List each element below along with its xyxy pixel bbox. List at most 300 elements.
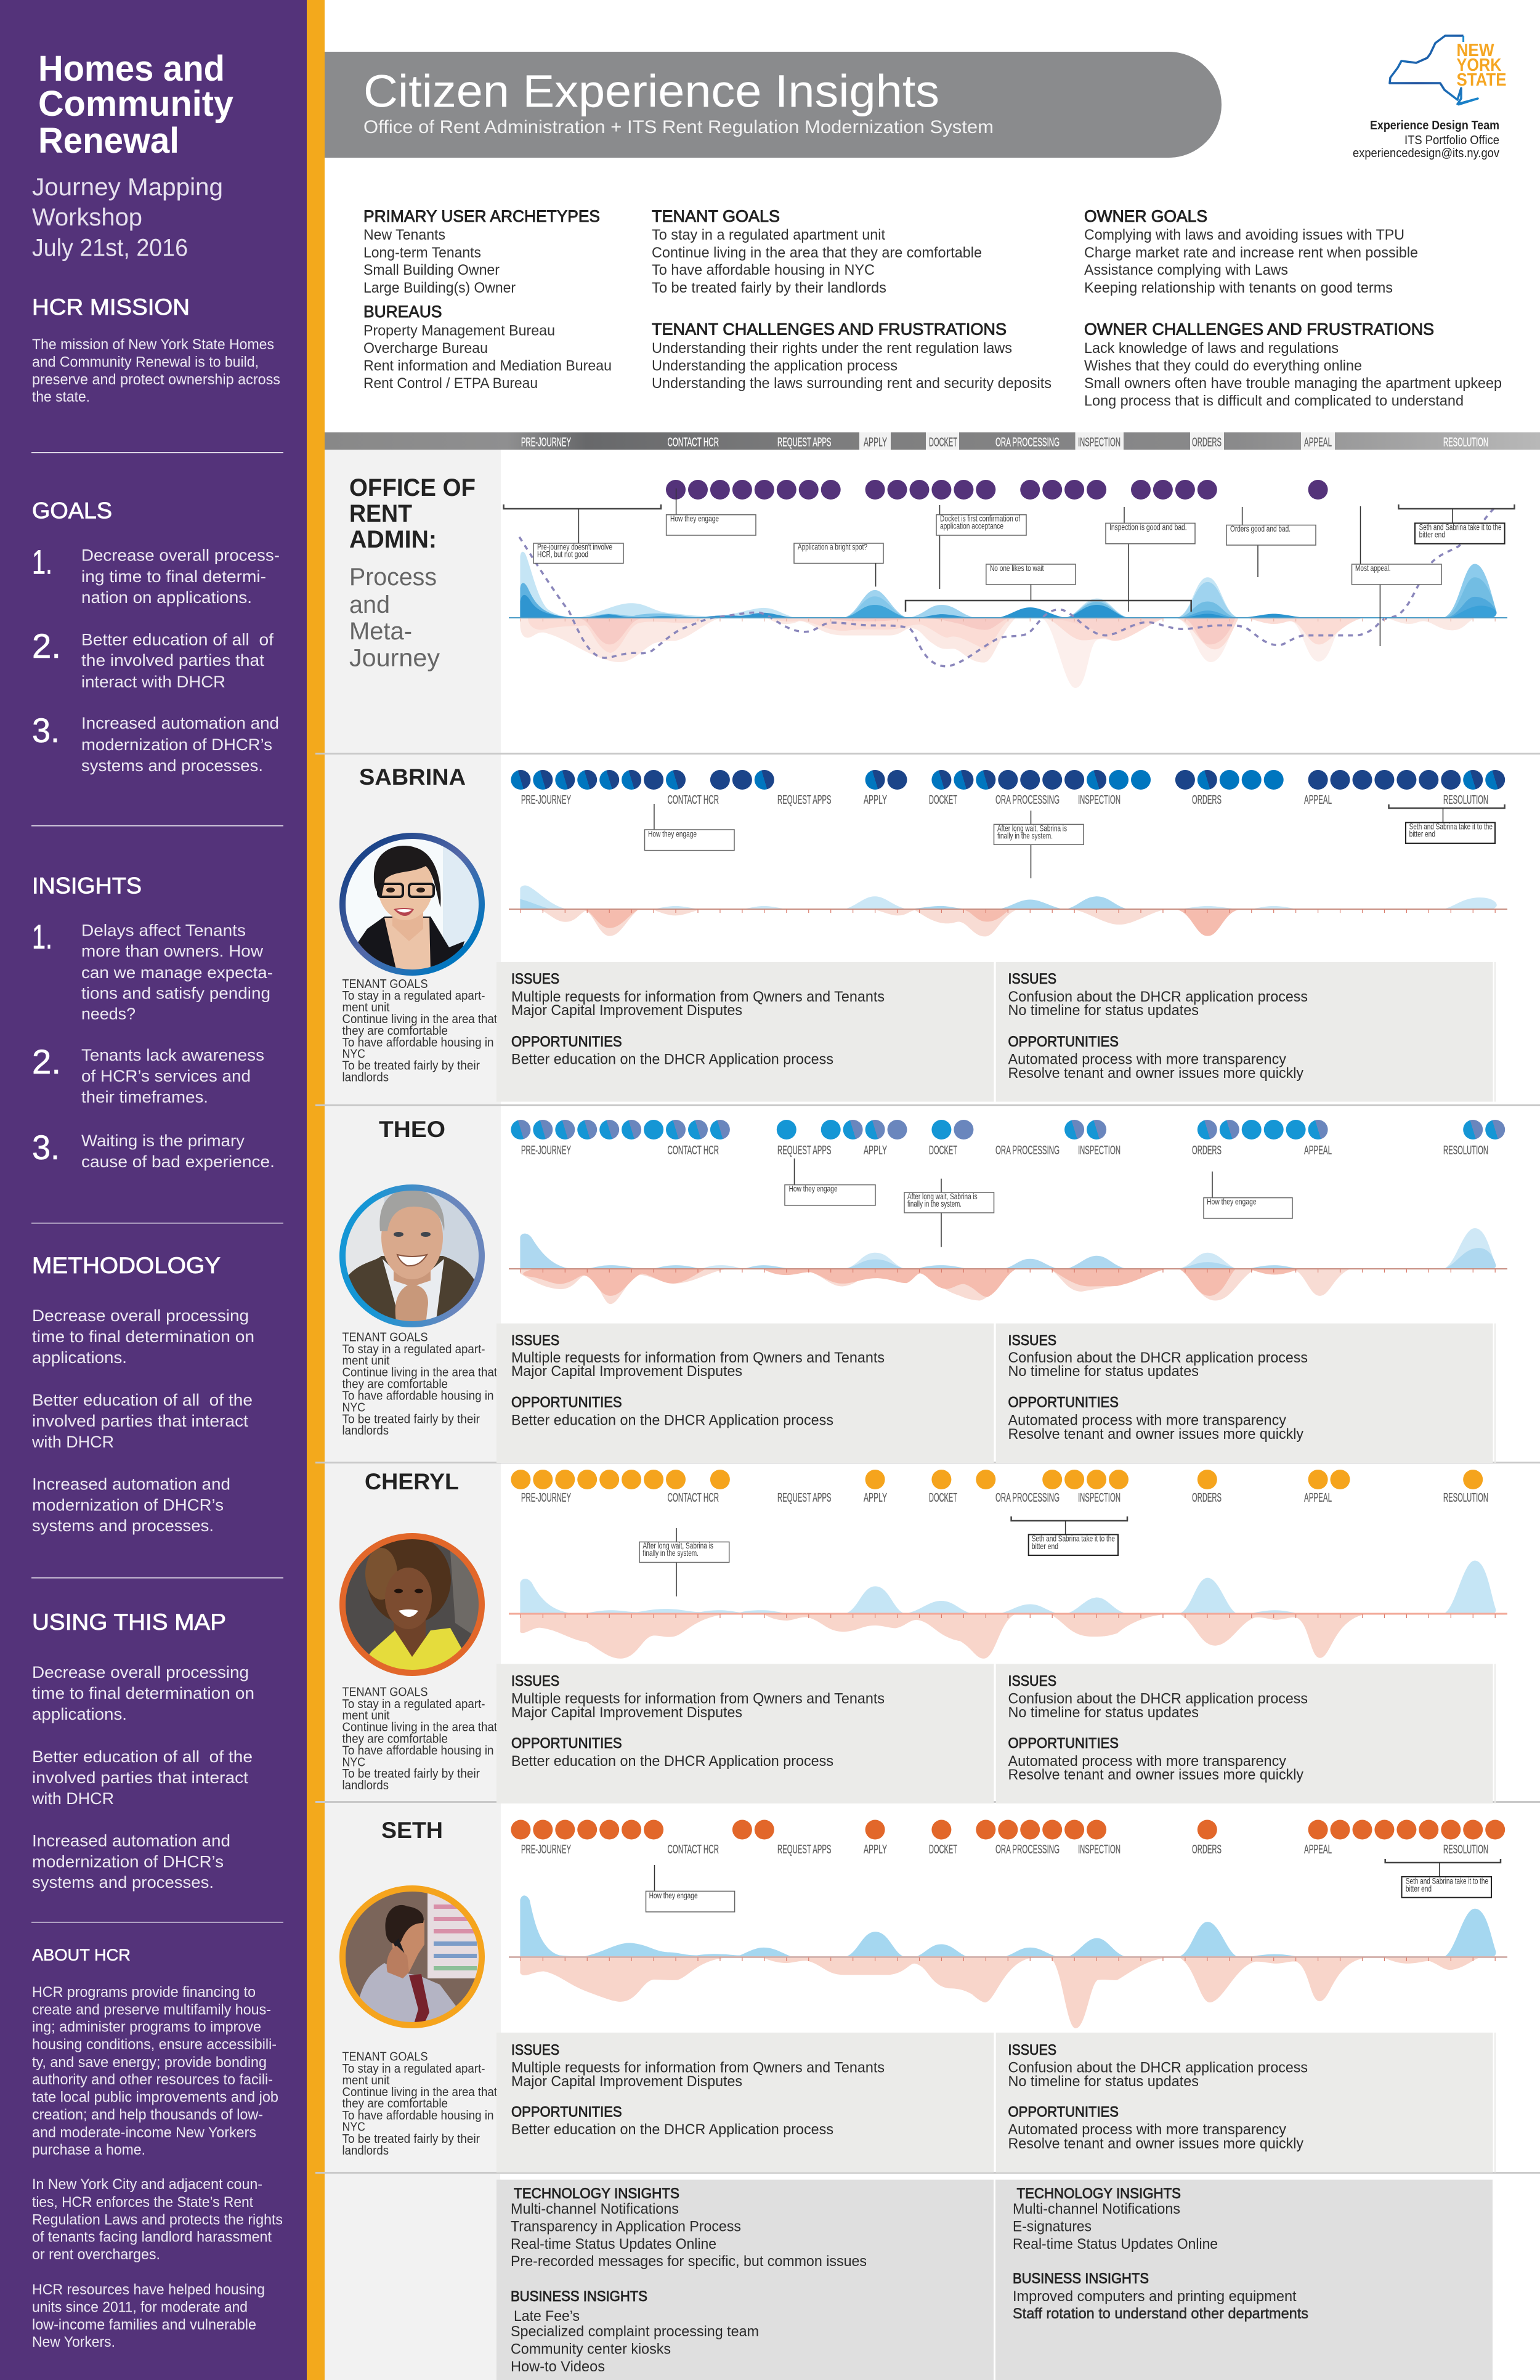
tenant goals: Sabrina: TENANT GOALS bbox=[342, 977, 428, 991]
callouts: Cheryl: After long wait, Sabrina is bbox=[642, 1540, 713, 1550]
office callouts: Docket is first confirmation of bbox=[940, 514, 1020, 524]
stage labels: Theo: APPLY bbox=[864, 1144, 887, 1157]
insights list: Waiting is the primary bbox=[81, 1131, 245, 1150]
panel: technology and business insights, right: E-signatures bbox=[1013, 2219, 1092, 2235]
name: Sabrina: SABRINA bbox=[359, 764, 466, 790]
logo: New York State: STATE bbox=[1456, 70, 1507, 90]
office callouts: Inspection is good and bad. bbox=[1109, 522, 1187, 532]
stage labels: Seth: INSPECTION bbox=[1078, 1843, 1121, 1856]
stage labels: Cheryl: DOCKET bbox=[929, 1491, 957, 1505]
stage labels: Sabrina: RESOLUTION bbox=[1443, 793, 1488, 807]
issues and opportunities: Sabrina, right: Resolve tenant and owner issues more quickly bbox=[1008, 1065, 1303, 1082]
area chart: Theo bbox=[520, 1228, 1496, 1304]
issues and opportunities: Sabrina, right: ISSUES bbox=[1008, 971, 1056, 987]
stage labels: Seth: CONTACT HCR bbox=[668, 1843, 719, 1856]
owner challenges: Lack knowledge of laws and regulations bbox=[1084, 340, 1339, 357]
bureaus: Rent information and Mediation Bureau bbox=[363, 357, 612, 374]
sidebar title: Community bbox=[38, 84, 233, 124]
issues and opportunities: Theo, right bbox=[996, 1324, 1496, 1463]
insights list: Delays affect Tenants bbox=[81, 921, 246, 940]
issues and opportunities: Theo, left: Multiple requests for information from Qwners and Tenants bbox=[511, 1350, 885, 1366]
insights list: of HCR’s services and bbox=[81, 1067, 251, 1085]
tenant goals: Theo: TENANT GOALS bbox=[342, 1330, 428, 1344]
sidebar title: Homes and bbox=[38, 49, 225, 89]
goals list: Better education of all of bbox=[81, 631, 274, 649]
logo: New York State: YORK bbox=[1456, 55, 1502, 75]
methodology: time to final determination on bbox=[32, 1327, 254, 1346]
tenant goals: Cheryl: To have affordable housing in bbox=[342, 1744, 494, 1757]
touchpoints: Cheryl bbox=[511, 1470, 1483, 1489]
tenant goals: Sabrina: they are comfortable bbox=[342, 1024, 448, 1038]
using this map bbox=[31, 1609, 254, 1892]
stage labels: Sabrina bbox=[521, 793, 1488, 807]
panel: technology and business insights, right: TECHNOLOGY INSIGHTS bbox=[1016, 2185, 1181, 2202]
tenant goals: Seth: To have affordable housing in bbox=[342, 2109, 494, 2123]
tenant goals: Sabrina: ment unit bbox=[342, 1001, 390, 1014]
issues and opportunities: Seth, right bbox=[996, 2033, 1496, 2172]
callouts: Seth bbox=[646, 1859, 1501, 1912]
goals list: systems and processes. bbox=[81, 756, 263, 775]
tenant goals: Cheryl: ment unit bbox=[342, 1709, 390, 1723]
owner challenges bbox=[1084, 320, 1502, 409]
stage labels: Seth: ORDERS bbox=[1192, 1843, 1222, 1856]
area chart: Cheryl bbox=[520, 1561, 1496, 1659]
panel: technology and business insights, left: Multi-channel Notifications bbox=[511, 2201, 679, 2217]
callouts: Theo: How they engage bbox=[789, 1184, 838, 1194]
stage labels: Cheryl: INSPECTION bbox=[1078, 1491, 1121, 1505]
using this map: Better education of all of the bbox=[32, 1747, 253, 1766]
journey stage header bar: REQUEST APPS bbox=[777, 435, 832, 449]
issues and opportunities: Theo, right: Confusion about the DHCR application process bbox=[1008, 1350, 1308, 1366]
issues and opportunities: Cheryl, right: OPPORTUNITIES bbox=[1008, 1735, 1119, 1752]
tenant goals: Cheryl bbox=[342, 1685, 497, 1792]
owner challenges: Wishes that they could do everything online bbox=[1084, 357, 1362, 374]
stage labels: Sabrina: APPEAL bbox=[1304, 793, 1332, 807]
goals list: nation on applications. bbox=[81, 588, 252, 607]
about HCR: Regulation Laws and protects the rights bbox=[32, 2212, 283, 2228]
bureaus bbox=[363, 302, 612, 392]
using this map: time to final determination on bbox=[32, 1684, 254, 1702]
panel: technology and business insights, left: Specialized complaint processing team bbox=[511, 2323, 759, 2340]
tenant goals: Seth: they are comfortable bbox=[342, 2097, 448, 2111]
tenant challenges: Understanding the application process bbox=[652, 357, 898, 374]
heading: office of rent admin: OFFICE OF bbox=[349, 474, 476, 501]
stage labels: Theo: INSPECTION bbox=[1078, 1144, 1121, 1157]
workshop name and date: Workshop bbox=[32, 204, 142, 231]
primary user archetypes: PRIMARY USER ARCHETYPES bbox=[363, 207, 600, 225]
office callouts: bitter end bbox=[1419, 530, 1445, 540]
goals list: 3. bbox=[32, 711, 60, 750]
stage labels: Cheryl: APPEAL bbox=[1304, 1491, 1332, 1505]
methodology: Increased automation and bbox=[32, 1475, 230, 1494]
issues and opportunities: Seth, right: No timeline for status updates bbox=[1008, 2073, 1199, 2090]
panel: technology and business insights, left: BUSINESS INSIGHTS bbox=[511, 2288, 647, 2305]
issues and opportunities: Seth, left: ISSUES bbox=[511, 2042, 559, 2058]
stage labels: Sabrina: INSPECTION bbox=[1078, 793, 1121, 807]
workshop name and date: Journey Mapping bbox=[32, 174, 223, 201]
about HCR: creation; and help thousands of low- bbox=[32, 2107, 263, 2123]
journey stage header bar: CONTACT HCR bbox=[668, 435, 719, 449]
tenant goals: Seth: TENANT GOALS bbox=[342, 2050, 428, 2064]
row: Sabrina bbox=[341, 764, 1507, 1102]
office touchpoint circles bbox=[666, 480, 1328, 500]
tenant goals: Sabrina: To stay in a regulated apart- bbox=[342, 989, 485, 1003]
journey stage header bar: APPEAL bbox=[1304, 435, 1332, 449]
issues and opportunities: Sabrina, left: ISSUES bbox=[511, 971, 559, 987]
journey stage header bar: ORA PROCESSING bbox=[995, 435, 1060, 449]
subheading: process and meta-journey: Meta- bbox=[349, 618, 412, 645]
journey stage header bar: PRE-JOURNEY bbox=[521, 435, 571, 449]
touchpoints: Seth bbox=[511, 1819, 1505, 1839]
stage labels: Sabrina: ORDERS bbox=[1192, 793, 1222, 807]
main title: Citizen Experience Insights bbox=[363, 65, 939, 117]
team credit: experiencedesign@its.ny.gov bbox=[1353, 147, 1499, 160]
about HCR bbox=[32, 1946, 283, 2350]
tenant challenges bbox=[652, 320, 1052, 392]
primary user archetypes: Small Building Owner bbox=[363, 262, 500, 278]
row: Cheryl bbox=[341, 1469, 1507, 1803]
stage labels: Sabrina: ORA PROCESSING bbox=[995, 793, 1060, 807]
white gap above insights panels bbox=[500, 2174, 1493, 2180]
tenant goals: Seth bbox=[342, 2050, 497, 2158]
tenant goals: Sabrina: landlords bbox=[342, 1071, 389, 1084]
stage labels: Theo: DOCKET bbox=[929, 1144, 957, 1157]
tenant goals: Cheryl: TENANT GOALS bbox=[342, 1685, 428, 1699]
office callouts: HCR, but not good bbox=[537, 549, 588, 559]
stage labels: Theo: RESOLUTION bbox=[1443, 1144, 1488, 1157]
panel: technology and business insights, left bbox=[496, 2180, 994, 2380]
methodology: modernization of DHCR’s bbox=[32, 1496, 224, 1514]
goals list: Decrease overall process- bbox=[81, 546, 280, 564]
primary user archetypes: Long-term Tenants bbox=[363, 245, 481, 261]
stage labels: Cheryl: REQUEST APPS bbox=[777, 1491, 832, 1505]
tenant goals: Cheryl: NYC bbox=[342, 1755, 365, 1769]
tenant goals: Cheryl: Continue living in the area that bbox=[342, 1721, 497, 1734]
owner goals: OWNER GOALS bbox=[1084, 207, 1207, 225]
callouts: Cheryl: bitter end bbox=[1032, 1541, 1058, 1551]
journey stage header bar: ORDERS bbox=[1192, 435, 1222, 449]
stage labels: Theo: REQUEST APPS bbox=[777, 1144, 832, 1157]
using this map: modernization of DHCR’s bbox=[32, 1853, 224, 1871]
stage labels: Sabrina: PRE-JOURNEY bbox=[521, 793, 571, 807]
heading: office of rent admin bbox=[349, 474, 476, 553]
tenant goals: Theo: To stay in a regulated apart- bbox=[342, 1343, 485, 1356]
about HCR: low-income families and vulnerable bbox=[32, 2317, 256, 2333]
callouts: Sabrina: finally in the system. bbox=[997, 831, 1053, 841]
issues and opportunities: Seth, left bbox=[496, 2033, 994, 2172]
touchpoints: Sabrina bbox=[511, 770, 1505, 790]
team credit bbox=[1353, 119, 1499, 160]
goals list: 1. bbox=[32, 542, 52, 581]
tenant goals: To have affordable housing in NYC bbox=[652, 262, 875, 278]
using this map: USING THIS MAP bbox=[32, 1609, 226, 1635]
tenant challenges: Understanding the laws surrounding rent and security deposits bbox=[652, 375, 1052, 392]
insights list: cause of bad experience. bbox=[81, 1152, 275, 1171]
issues and opportunities: Sabrina, left: Multiple requests for information from Qwners and Tenants bbox=[511, 989, 885, 1005]
journey stage header bar: INSPECTION bbox=[1078, 435, 1121, 449]
about HCR: units since 2011, for moderate and bbox=[32, 2299, 248, 2316]
bureaus: Property Management Bureau bbox=[363, 323, 555, 339]
issues and opportunities: Cheryl, left: Multiple requests for information from Qwners and Tenants bbox=[511, 1690, 885, 1707]
insights list: INSIGHTS bbox=[32, 873, 142, 899]
tenant goals: To stay in a regulated apartment unit bbox=[652, 227, 885, 243]
issues and opportunities: Theo, left: ISSUES bbox=[511, 1332, 559, 1349]
issues and opportunities: Seth, right: Confusion about the DHCR application process bbox=[1008, 2060, 1308, 2076]
stage labels: Seth: APPEAL bbox=[1304, 1843, 1332, 1856]
issues and opportunities: Sabrina, left: OPPORTUNITIES bbox=[511, 1034, 622, 1050]
tenant goals: Seth: landlords bbox=[342, 2144, 389, 2158]
issues and opportunities: Seth, right: Resolve tenant and owner issues more quickly bbox=[1008, 2135, 1303, 2152]
issues and opportunities: Sabrina, right: Automated process with more transparency bbox=[1008, 1051, 1286, 1068]
panel: technology and business insights, left: How-to Videos bbox=[511, 2358, 605, 2375]
name: Cheryl: CHERYL bbox=[365, 1469, 459, 1494]
using this map: Decrease overall processing bbox=[32, 1663, 249, 1682]
stage labels: Theo bbox=[521, 1144, 1488, 1157]
about HCR: or rent overcharges. bbox=[32, 2246, 160, 2263]
panel: technology and business insights, left: Real-time Status Updates Online bbox=[511, 2236, 716, 2252]
about HCR: ties, HCR enforces the State’s Rent bbox=[32, 2194, 253, 2211]
stage labels: Cheryl: ORDERS bbox=[1192, 1491, 1222, 1505]
callouts: Sabrina: Seth and Sabrina take it to the bbox=[1409, 822, 1493, 832]
tenant goals: Seth: To stay in a regulated apart- bbox=[342, 2062, 485, 2076]
callouts: Sabrina: How they engage bbox=[648, 829, 697, 839]
issues and opportunities: Theo, left bbox=[496, 1324, 994, 1463]
subheading: process and meta-journey: and bbox=[349, 591, 390, 618]
tenant goals: Theo: Continue living in the area that bbox=[342, 1366, 497, 1380]
issues and opportunities: Theo, right: Resolve tenant and owner issues more quickly bbox=[1008, 1426, 1303, 1443]
issues and opportunities: Cheryl, left: ISSUES bbox=[511, 1673, 559, 1690]
bureaus: Overcharge Bureau bbox=[363, 340, 488, 357]
office area chart bbox=[519, 507, 1496, 688]
tenant challenges: Understanding their rights under the rent regulation laws bbox=[652, 340, 1012, 357]
office callouts: Most appeal. bbox=[1355, 563, 1391, 573]
insights list: their timeframes. bbox=[81, 1088, 208, 1106]
tenant goals: Seth: Continue living in the area that bbox=[342, 2086, 497, 2099]
stage labels: Seth: PRE-JOURNEY bbox=[521, 1843, 571, 1856]
about HCR: New Yorkers. bbox=[32, 2334, 115, 2350]
callouts: Seth: Seth and Sabrina take it to the bbox=[1406, 1876, 1488, 1886]
issues and opportunities: Seth, right: Automated process with more transparency bbox=[1008, 2121, 1286, 2138]
team credit: ITS Portfolio Office bbox=[1404, 134, 1499, 147]
stage labels: Sabrina: REQUEST APPS bbox=[777, 793, 832, 807]
issues and opportunities: Seth, left: Major Capital Improvement Disputes bbox=[511, 2073, 742, 2090]
about HCR: and moderate-income New Yorkers bbox=[32, 2124, 256, 2141]
panel: technology and business insights, left: Community center kiosks bbox=[511, 2341, 671, 2358]
callouts: Cheryl: finally in the system. bbox=[642, 1548, 699, 1558]
owner challenges: OWNER CHALLENGES AND FRUSTRATIONS bbox=[1084, 320, 1434, 339]
issues and opportunities: Seth, left: Better education on the DHCR Application process bbox=[511, 2121, 833, 2138]
about HCR: housing conditions, ensure accessibili- bbox=[32, 2036, 277, 2053]
tenant goals: Cheryl: they are comfortable bbox=[342, 1732, 448, 1746]
insights list: more than owners. How bbox=[81, 942, 264, 960]
primary user archetypes bbox=[363, 207, 600, 296]
stage labels: Seth: DOCKET bbox=[929, 1843, 957, 1856]
stage labels: Seth: REQUEST APPS bbox=[777, 1843, 832, 1856]
about HCR: of tenants facing landlord harassment bbox=[32, 2228, 272, 2246]
HCR mission bbox=[32, 294, 280, 405]
insights list: can we manage expecta- bbox=[81, 963, 273, 982]
callouts: Seth: bitter end bbox=[1406, 1884, 1432, 1893]
portrait: Cheryl bbox=[341, 1534, 483, 1675]
tenant goals: Theo: To have affordable housing in bbox=[342, 1390, 494, 1403]
tenant goals: Sabrina: To have affordable housing in bbox=[342, 1036, 494, 1050]
office callouts: Orders good and bad. bbox=[1230, 524, 1291, 533]
header banner bbox=[325, 52, 1222, 158]
stage labels: Cheryl: CONTACT HCR bbox=[668, 1491, 719, 1505]
office callouts: How they engage bbox=[670, 514, 719, 524]
subheading: process and meta-journey bbox=[349, 564, 440, 671]
tenant goals: Theo: To be treated fairly by their bbox=[342, 1413, 480, 1427]
touchpoints: Theo bbox=[511, 1120, 1505, 1139]
callouts: Seth: How they engage bbox=[649, 1890, 698, 1900]
primary user archetypes: Large Building(s) Owner bbox=[363, 280, 516, 296]
goals list bbox=[32, 498, 280, 775]
about HCR: HCR programs provide financing to bbox=[32, 1984, 256, 2001]
methodology: applications. bbox=[32, 1348, 127, 1367]
portrait: Theo bbox=[341, 1185, 483, 1327]
issues and opportunities: Sabrina, right: Confusion about the DHCR application process bbox=[1008, 989, 1308, 1005]
goals list: modernization of DHCR’s bbox=[81, 735, 272, 754]
stage labels: Cheryl: ORA PROCESSING bbox=[995, 1491, 1060, 1505]
HCR mission: preserve and protect ownership across bbox=[32, 371, 280, 388]
issues and opportunities: Theo, right: OPPORTUNITIES bbox=[1008, 1394, 1119, 1411]
issues and opportunities: Seth, right: OPPORTUNITIES bbox=[1008, 2104, 1119, 2121]
issues and opportunities: Theo, left: Better education on the DHCR Application process bbox=[511, 1412, 833, 1429]
panel: technology and business insights, right: BUSINESS INSIGHTS bbox=[1013, 2270, 1149, 2287]
using this map: Increased automation and bbox=[32, 1832, 230, 1850]
primary user archetypes: New Tenants bbox=[363, 227, 445, 243]
stage labels: Cheryl: RESOLUTION bbox=[1443, 1491, 1488, 1505]
office callouts: application acceptance bbox=[940, 521, 1003, 531]
tenant goals: Continue living in the area that they are comfortable bbox=[652, 245, 982, 261]
methodology bbox=[31, 1253, 254, 1535]
issues and opportunities: Theo, right: Automated process with more transparency bbox=[1008, 1412, 1286, 1429]
heading: office of rent admin: ADMIN: bbox=[349, 526, 437, 553]
workshop name and date bbox=[32, 174, 223, 261]
insights list: 3. bbox=[32, 1128, 60, 1167]
sidebar title bbox=[38, 49, 233, 161]
journey stage header bar: DOCKET bbox=[929, 435, 957, 449]
about HCR: In New York City and adjacent coun- bbox=[32, 2176, 262, 2193]
panel: technology and business insights, right: Multi-channel Notifications bbox=[1013, 2201, 1180, 2217]
HCR mission: the state. bbox=[32, 389, 90, 405]
callouts: Cheryl bbox=[639, 1516, 1127, 1597]
stage labels: Seth bbox=[521, 1843, 1488, 1856]
callouts: Theo bbox=[785, 1159, 1292, 1247]
callouts: Sabrina: After long wait, Sabrina is bbox=[997, 823, 1067, 833]
tenant goals: Sabrina: NYC bbox=[342, 1048, 365, 1061]
subheading: process and meta-journey: Journey bbox=[349, 644, 440, 671]
issues and opportunities: Theo, right: No timeline for status updates bbox=[1008, 1363, 1199, 1380]
callouts: Theo: How they engage bbox=[1207, 1197, 1257, 1207]
using this map: with DHCR bbox=[31, 1789, 114, 1808]
bureaus: Rent Control / ETPA Bureau bbox=[363, 375, 538, 392]
workshop name and date: July 21st, 2016 bbox=[32, 234, 188, 261]
journey stage header bar: APPLY bbox=[864, 435, 887, 449]
HCR mission: and Community Renewal is to build, bbox=[32, 354, 259, 371]
methodology: with DHCR bbox=[31, 1433, 114, 1451]
panel: technology and business insights, right: Improved computers and printing equipment bbox=[1013, 2288, 1297, 2305]
logo: New York State: NEW bbox=[1456, 41, 1494, 60]
about HCR: ing; administer programs to improve bbox=[32, 2019, 261, 2035]
tenant goals: Sabrina bbox=[342, 977, 497, 1084]
insights list: Tenants lack awareness bbox=[81, 1046, 264, 1064]
portrait: Sabrina bbox=[341, 833, 486, 975]
issues and opportunities: Sabrina, right: OPPORTUNITIES bbox=[1008, 1034, 1119, 1050]
owner challenges: Small owners often have trouble managing the apartment upkeep bbox=[1084, 375, 1502, 392]
row: Office of Rent Admin bbox=[349, 474, 1514, 688]
tenant goals: Cheryl: To be treated fairly by their bbox=[342, 1767, 480, 1781]
callouts: Theo: After long wait, Sabrina is bbox=[907, 1191, 978, 1201]
goals list: the involved parties that bbox=[81, 651, 265, 670]
issues and opportunities: Seth, right: ISSUES bbox=[1008, 2042, 1056, 2058]
issues and opportunities: Theo, left: Major Capital Improvement Disputes bbox=[511, 1363, 742, 1380]
methodology: METHODOLOGY bbox=[32, 1253, 221, 1278]
stage labels: Seth: APPLY bbox=[864, 1843, 887, 1856]
callouts: Sabrina bbox=[644, 804, 1505, 878]
subheading: process and meta-journey: Process bbox=[349, 564, 437, 591]
about HCR: HCR resources have helped housing bbox=[32, 2281, 265, 2298]
about HCR: tate local public improvements and job bbox=[32, 2089, 278, 2105]
tenant goals: Seth: To be treated fairly by their bbox=[342, 2132, 480, 2146]
about HCR: ABOUT HCR bbox=[32, 1946, 131, 1964]
area chart: Sabrina bbox=[520, 886, 1497, 936]
stage labels: Cheryl bbox=[521, 1491, 1488, 1505]
callouts: Theo: finally in the system. bbox=[907, 1199, 962, 1208]
about HCR: authority and other resources to facili- bbox=[32, 2071, 273, 2088]
tenant challenges: TENANT CHALLENGES AND FRUSTRATIONS bbox=[652, 320, 1007, 339]
panel: technology and business insights, left: TECHNOLOGY INSIGHTS bbox=[514, 2185, 679, 2202]
methodology: Better education of all of the bbox=[32, 1391, 253, 1409]
insights list: needs? bbox=[81, 1005, 136, 1023]
using this map: systems and processes. bbox=[32, 1873, 214, 1892]
journey stage header bar bbox=[325, 432, 1540, 450]
office callouts bbox=[504, 488, 1514, 646]
issues and opportunities: Sabrina, left: Better education on the DHCR Application process bbox=[511, 1051, 833, 1068]
panel: technology and business insights, right: Staff rotation to understand other departments bbox=[1013, 2305, 1308, 2322]
HCR mission: HCR MISSION bbox=[32, 294, 190, 320]
stage labels: Sabrina: CONTACT HCR bbox=[668, 793, 719, 807]
goals list: GOALS bbox=[32, 498, 112, 524]
owner challenges: Long process that is difficult and complicated to understand bbox=[1084, 393, 1464, 409]
tenant goals: Cheryl: landlords bbox=[342, 1779, 389, 1792]
stage labels: Theo: PRE-JOURNEY bbox=[521, 1144, 571, 1157]
bureaus: BUREAUS bbox=[363, 302, 442, 321]
methodology: systems and processes. bbox=[32, 1516, 214, 1535]
panel: technology and business insights, right: Real-time Status Updates Online bbox=[1013, 2236, 1218, 2252]
stage labels: Cheryl: APPLY bbox=[864, 1491, 887, 1505]
journey stage header bar: RESOLUTION bbox=[1443, 435, 1488, 449]
tenant goals: Seth: NYC bbox=[342, 2121, 365, 2134]
using this map: involved parties that interact bbox=[32, 1768, 249, 1787]
tenant goals: Theo: they are comfortable bbox=[342, 1377, 448, 1391]
issues and opportunities: Sabrina, right bbox=[996, 962, 1496, 1102]
issues and opportunities: Cheryl, left: Major Capital Improvement Disputes bbox=[511, 1704, 742, 1721]
issues and opportunities: Sabrina, left: Major Capital Improvement Disputes bbox=[511, 1002, 742, 1019]
panel: technology and business insights, left: Pre-recorded messages for specific, but common issues bbox=[511, 2253, 867, 2270]
issues and opportunities: Cheryl, right: ISSUES bbox=[1008, 1673, 1056, 1690]
issues and opportunities: Cheryl, right bbox=[996, 1664, 1496, 1803]
area chart: Seth bbox=[520, 1895, 1496, 2028]
issues and opportunities: Cheryl, left bbox=[496, 1664, 994, 1803]
heading: office of rent admin: RENT bbox=[349, 500, 412, 527]
portrait: Seth bbox=[341, 1886, 483, 2028]
stage labels: Seth: ORA PROCESSING bbox=[995, 1843, 1060, 1856]
issues and opportunities: Sabrina, left bbox=[496, 962, 994, 1102]
insights list: tions and satisfy pending bbox=[81, 984, 270, 1003]
issues and opportunities: Theo, left: OPPORTUNITIES bbox=[511, 1394, 622, 1411]
issues and opportunities: Cheryl, right: Automated process with more transparency bbox=[1008, 1753, 1286, 1770]
